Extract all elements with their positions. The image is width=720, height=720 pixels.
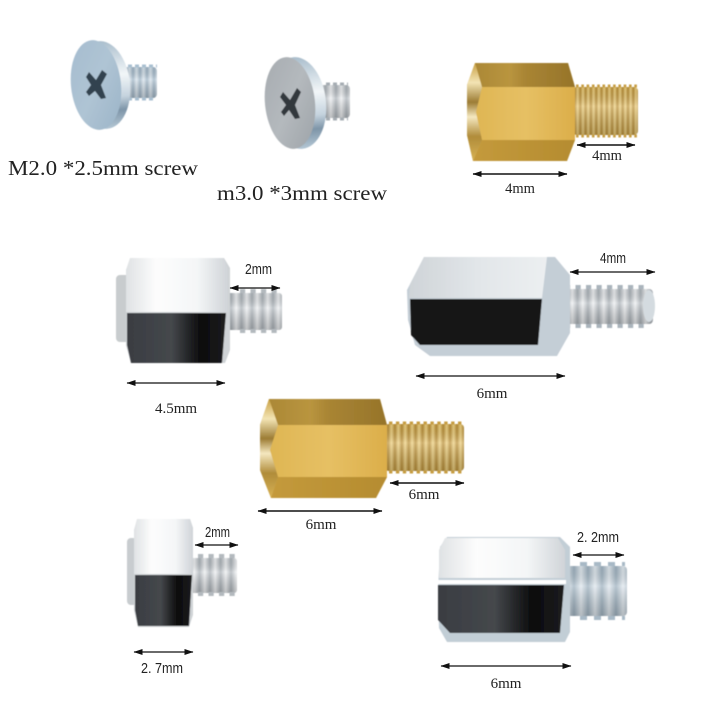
dimension: brass body 6mm: [258, 511, 382, 533]
dimension: brass body 4mm: 4mm: [505, 181, 536, 197]
dimension: silver short body 2.7mm: 2. 7mm: [141, 661, 183, 677]
dimension: silver thread 2.2mm: [573, 530, 624, 555]
standoff: silver 4.5mm: [116, 258, 282, 363]
standoff: brass 4mm: [467, 63, 638, 161]
screw: M3.0 grey zinc: [260, 54, 350, 152]
dimension: silver short thread 2mm: [195, 525, 238, 545]
screw: M2.0 blue zinc: [66, 38, 157, 132]
standoff: silver 6mm long thread: [407, 257, 655, 356]
dimension: silver short thread 2mm: 2mm: [205, 525, 230, 541]
dimension: brass body 4mm: [473, 174, 567, 197]
label: M2.0 screw: M2.0 *2.5mm screw: [8, 156, 199, 180]
dimension: silver long thread 4mm: 4mm: [600, 251, 626, 267]
dimension: silver long thread 4mm: [570, 251, 655, 272]
dimension: brass thread 6mm: [390, 483, 464, 503]
dimension: silver body 4.5mm: 4.5mm: [155, 401, 197, 417]
dimension: silver long body 6mm: 6mm: [477, 386, 508, 402]
dimension: silver body 6mm: [441, 666, 571, 692]
dimension: brass thread 4mm: [577, 145, 635, 164]
dimension: silver body 4.5mm: [127, 383, 225, 417]
dimension: silver thread 2mm: 2mm: [245, 261, 272, 278]
standoff: silver 2.7mm: [127, 519, 237, 627]
dimension: brass thread 4mm: 4mm: [592, 148, 623, 164]
dimension: silver thread 2.2mm: 2. 2mm: [577, 530, 619, 546]
standoff: silver 6mm wide thread: [438, 537, 627, 642]
dimension: brass body 6mm: 6mm: [306, 517, 337, 533]
label: M3.0 screw: m3.0 *3mm screw: [217, 181, 388, 205]
dimension: brass thread 6mm: 6mm: [409, 487, 440, 503]
standoff: brass 6mm: [260, 399, 464, 498]
dimension: silver body 6mm: 6mm: [491, 676, 522, 692]
dimension: silver short body 2.7mm: [134, 652, 193, 677]
dimension: silver thread 2mm: [230, 261, 280, 288]
